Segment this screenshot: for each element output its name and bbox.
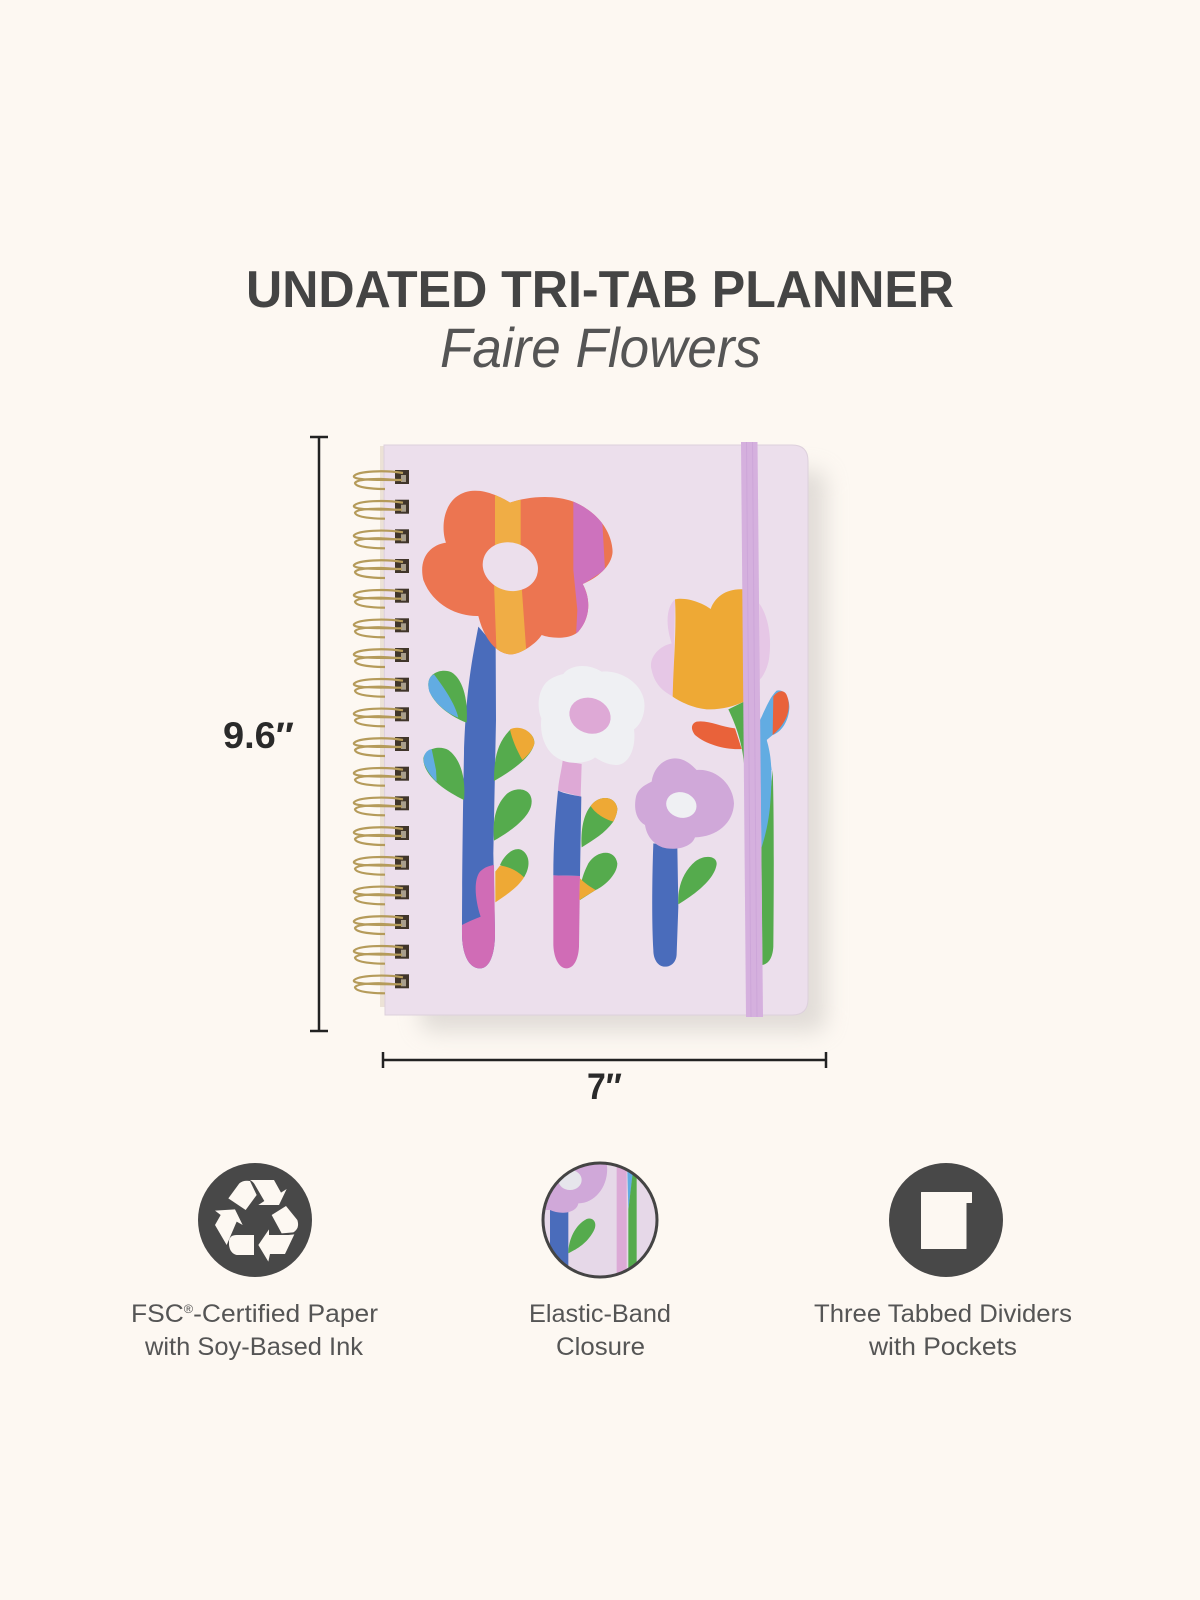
caption: FSC certified paper: with Soy-Based Ink — [144, 1333, 363, 1361]
big orange flower — [417, 487, 617, 968]
caption: FSC certified paper: -Certified Paper — [193, 1300, 378, 1328]
planner illustration — [354, 442, 826, 1032]
spiral binding — [354, 470, 409, 993]
caption: FSC certified paper: FSC — [131, 1300, 181, 1328]
caption: elastic-band closure: Closure — [556, 1333, 645, 1361]
caption: three tabbed dividers: with Pockets — [868, 1333, 1017, 1361]
flower head — [417, 487, 617, 660]
caption: FSC certified paper: ® — [184, 1302, 193, 1316]
white flower with stem — [539, 666, 644, 968]
notebook shadow — [420, 470, 826, 1032]
icon: recycling symbol — [198, 1163, 312, 1277]
caption: elastic-band closure: Elastic-Band — [529, 1300, 671, 1328]
dimension: height: 9.6″ — [223, 715, 294, 756]
notebook spine edge — [380, 446, 385, 1007]
notebook cover — [384, 445, 808, 1015]
dimension: width — [383, 1052, 826, 1107]
stem — [423, 627, 534, 968]
subtitle: Faire Flowers — [440, 316, 761, 379]
icon: elastic band closure — [540, 1160, 660, 1280]
elastic band — [741, 442, 763, 1017]
tulip — [651, 589, 789, 770]
dimension: width: 7″ — [587, 1066, 622, 1107]
caption: FSC certified paper — [131, 1300, 378, 1361]
purple flower with stem — [635, 758, 734, 967]
icon: tabbed divider — [889, 1163, 1003, 1277]
dimension: height — [223, 437, 328, 1031]
caption: elastic-band closure — [529, 1300, 671, 1361]
tulip long stem — [760, 740, 774, 965]
title: UNDATED TRI-TAB PLANNER — [246, 261, 954, 319]
caption: three tabbed dividers — [814, 1300, 1072, 1361]
caption: three tabbed dividers: Three Tabbed Dividers — [814, 1300, 1072, 1328]
